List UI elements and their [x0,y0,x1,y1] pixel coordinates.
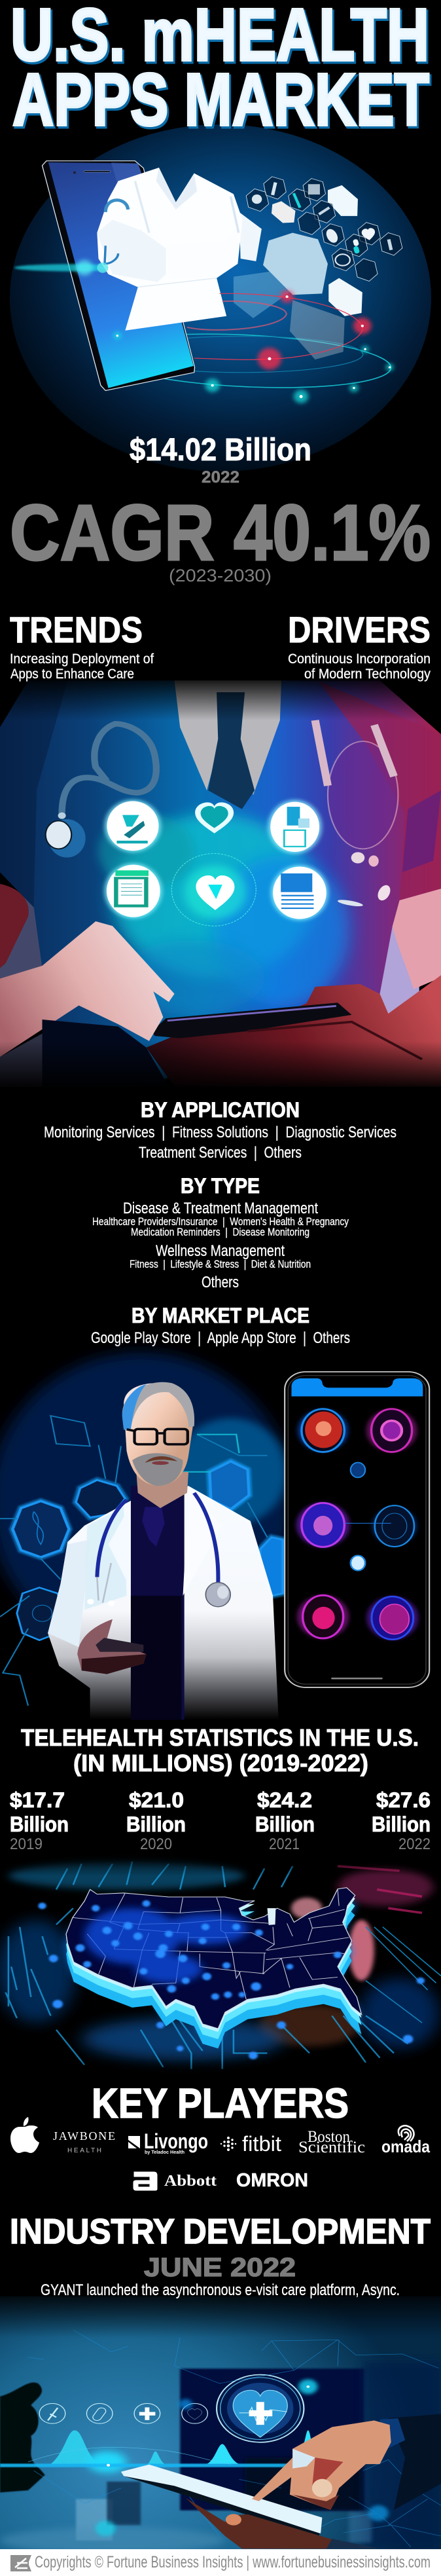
orbit ring: red [187,293,362,359]
logo: Boston Scientific [298,2128,365,2156]
segmentation: by application: BY APPLICATION [141,1098,300,1122]
white hexagon tiles [234,185,362,359]
molecular hexagon background [0,1353,292,1706]
logo: Livongo [128,2129,208,2155]
forearms [0,884,441,989]
trends: TRENDS [10,609,143,650]
segmentation: by type: Others [202,1274,239,1291]
small circular health icons [39,2404,207,2423]
segmentation: by application: Treatment Services | Others [139,1144,302,1162]
logo: Fitbit [220,2132,281,2156]
statistic 2021 [255,1788,315,1853]
glowing USA map on circuit board [0,1850,441,2089]
statistic 2019: Billion [10,1812,69,1836]
drivers: Continuous Incorporation [288,652,431,667]
footer logo [10,2555,31,2571]
stethoscope [87,1493,230,1607]
outlined hexagon icons [246,177,402,281]
segmentation: by type: BY TYPE [181,1174,260,1198]
logo: Jawbone Health [53,2129,115,2154]
heart icons [171,802,256,926]
right hand and smartphone [147,975,441,1087]
segmentation: by type: Wellness Management [156,1242,285,1260]
logo: Boston Scientific: Scientific [298,2139,365,2156]
segmentation: by market place: BY MARKET PLACE [132,1304,309,1327]
network mesh [28,2330,441,2547]
logo: Omron: OMRON [236,2170,308,2191]
lens flare [14,260,127,276]
plant silhouette [0,2383,45,2492]
stethoscope: left [46,724,156,858]
main heart emblem [217,2375,317,2442]
lab coat [97,168,243,331]
orbit ring: cyan [97,328,393,394]
trends [10,609,154,682]
pointing hand [252,2414,441,2510]
central glow [98,814,349,1015]
trends: Apps to Enhance Care [10,667,134,682]
logo: Livongo: Livongo [144,2129,208,2153]
map extrusion glow [66,1891,362,2048]
health icon circles [105,800,328,921]
logo: Jawbone Health: JAWBONE [53,2129,115,2143]
statistic 2021: $24.2 [257,1788,312,1812]
statistic 2021: 2021 [269,1835,300,1853]
circuit board background [0,1862,441,2069]
title [10,0,431,143]
segmentation: by market place [91,1304,350,1347]
statistic 2020 [126,1788,186,1853]
blurred foreground objects [0,2482,372,2554]
market size [130,433,311,487]
telehealth heading: (IN MILLIONS) (2019-2022) [73,1750,368,1776]
stethoscope: right [315,720,398,908]
statistic 2022: Billion [372,1812,431,1836]
doctor in lab coat beside app phone [0,1353,429,1720]
statistic 2020: 2020 [140,1835,172,1853]
logo: Fitbit: fitbit [242,2132,281,2156]
segmentation: by type: Disease & Treatment Management [123,1200,318,1217]
pulse peaks [50,2430,313,2473]
logo: Apple [10,2117,39,2153]
footer [0,2549,441,2576]
drivers: of Modern Technology [304,667,431,682]
shirt collar and tie [175,680,281,809]
scrub top [0,680,441,1087]
trends: Increasing Deployment of [10,652,154,667]
segmentation: by type: Fitness | Lifestyle & Stress | Diet & Nutrition [130,1258,311,1270]
tablet [121,2465,322,2537]
small hexagon glyphs [252,182,393,266]
statistic 2021: Billion [255,1812,315,1836]
logo: Abbott [133,2172,217,2190]
development date: JUNE 2022 [144,2253,296,2282]
telehealth heading [21,1724,419,1776]
state lines [73,1890,349,1999]
city light dots [38,1900,425,2059]
segmentation: by application [44,1098,397,1162]
dark monitor [180,2362,441,2549]
holding hand [186,2498,332,2548]
market size: $14.02 Billion [130,433,311,468]
app phone [285,1372,429,1687]
glowing network nodes [113,291,394,403]
lab coat [48,1486,279,1720]
logo: Boston Scientific: Boston [308,2128,350,2146]
logo: Livongo: by Teladoc Health [145,2150,185,2155]
hand holding phone [77,1619,147,1674]
logo: Omada: omada [381,2137,430,2156]
illustration: tablet with health hologram [0,2289,441,2554]
statistic 2019: 2019 [10,1835,43,1853]
doctor with floating health icons [0,674,441,1090]
statistic 2022: 2022 [398,1835,431,1853]
statistic 2022 [372,1788,431,1853]
statistic 2019: $17.7 [10,1788,65,1812]
statistic 2019 [10,1788,69,1853]
statistic 2022: $27.6 [376,1788,431,1812]
logo: Abbott: Abbott [164,2173,217,2190]
hero illustration: phone, lab coat and medical hexagons [10,124,431,471]
segmentation: by type: Healthcare Providers/Insurance | Women's Health & Pregnancy [92,1215,349,1228]
telehealth heading: TELEHEALTH STATISTICS IN THE U.S. [21,1724,419,1751]
segmentation: by type: Medication Reminders | Disease Monitoring [131,1226,309,1238]
logo: Omada [381,2125,430,2156]
segmentation: by market place: Google Play Store | Apple App Store | Others [91,1329,350,1347]
statistic 2020: Billion [126,1812,186,1836]
smartphone [42,161,195,390]
app circles [296,1409,418,1640]
logo: Jawbone Health: HEALTH [67,2147,101,2154]
horizontal light beam [0,2447,332,2467]
market size: 2022 [202,468,239,487]
head [122,1382,194,1508]
key players heading: KEY PLAYERS [92,2080,349,2127]
segmentation: by type [92,1174,349,1291]
statistic 2020: $21.0 [129,1788,184,1812]
CAGR: (2023-2030) [169,566,272,585]
left hand [0,921,175,1087]
drivers [288,609,431,682]
map land [66,1888,362,2029]
